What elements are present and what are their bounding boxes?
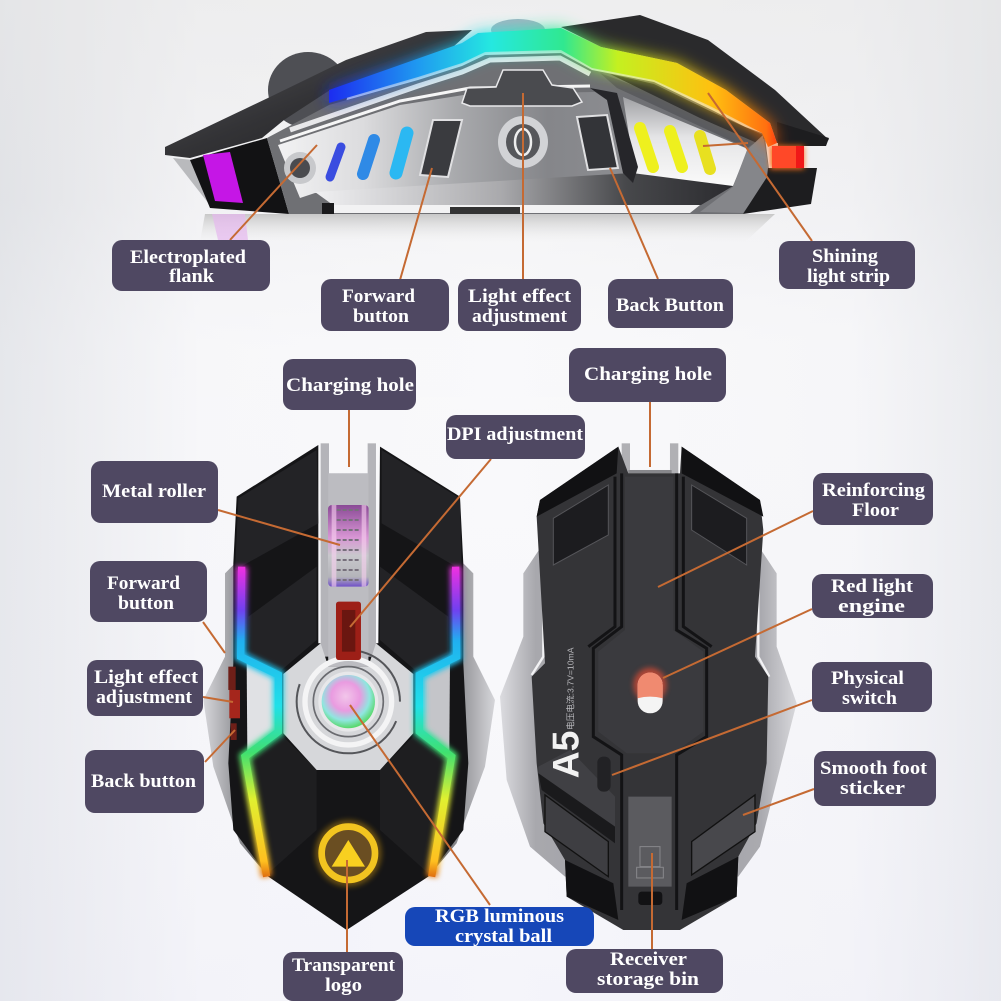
label: Charging hole right <box>569 348 726 402</box>
A5 diagonal band <box>538 750 615 827</box>
label: RGB luminous crystal ball: RGB luminous <box>435 906 564 927</box>
right panel <box>623 97 748 186</box>
central octagon <box>283 643 413 770</box>
label: Reinforcing Floor: Floor <box>852 500 900 521</box>
label: Forward button: Forward <box>342 286 415 307</box>
label: Light effect adjustment: adjustment <box>472 306 568 327</box>
reflection <box>200 214 775 242</box>
forward button <box>420 120 462 177</box>
label: Back button left <box>85 750 204 813</box>
concentric rings <box>297 650 400 753</box>
label: RGB luminous crystal ball: crystal ball <box>455 926 552 947</box>
label: DPI adjustment: DPI adjustment <box>447 424 584 445</box>
flank main panel <box>278 92 632 198</box>
label: Forward button left: button <box>118 593 174 614</box>
right wedge <box>700 135 770 213</box>
right silver wing <box>428 563 495 877</box>
right silver panel <box>420 662 450 752</box>
rating text: 电压电流:3.7V=10mA <box>564 647 575 730</box>
label: Forward button: button <box>353 306 409 327</box>
scroll wheel <box>268 52 348 128</box>
label: Forward button <box>321 279 449 331</box>
yellow light bars <box>640 128 710 169</box>
white edge highlights <box>532 543 769 677</box>
nose <box>190 138 289 214</box>
left top shell <box>165 30 472 158</box>
label: Light effect adjustment <box>458 279 581 331</box>
label: Back button left: Back button <box>91 771 196 792</box>
crystal ball <box>322 675 375 728</box>
label: Electroplated flank: flank <box>169 266 214 287</box>
label: Shining light strip: Shining <box>812 246 879 267</box>
base plate <box>532 447 768 930</box>
foot sticker bottom right <box>692 795 755 875</box>
label: Transparent logo: Transparent <box>292 955 396 976</box>
label: Shining light strip <box>779 241 915 289</box>
label: RGB luminous crystal ball <box>405 906 594 947</box>
central hex panel <box>598 477 703 753</box>
label: Physical switch: switch <box>842 688 897 709</box>
label: Electroplated flank: Electroplated <box>130 247 246 268</box>
physical switch <box>597 757 611 792</box>
label: Metal roller: Metal roller <box>102 481 207 502</box>
label: Light effect adjustment left: Light effect <box>94 667 199 688</box>
receiver bin <box>628 797 672 905</box>
label: Smooth foot sticker: Smooth foot <box>820 758 928 779</box>
leader lines <box>203 93 814 952</box>
label: Forward button left: Forward <box>107 573 180 594</box>
label: Smooth foot sticker <box>814 751 936 806</box>
blue light bars <box>330 133 407 177</box>
label: DPI adjustment <box>446 415 585 459</box>
side buttons <box>228 667 240 740</box>
foot sticker bottom left <box>545 795 608 877</box>
chin silver wedge <box>173 158 209 204</box>
rear curved slot <box>590 88 638 183</box>
crystal ball top <box>491 19 545 41</box>
label: Physical switch <box>812 662 932 712</box>
transparent logo <box>315 820 382 887</box>
label: Charging hole left: Charging hole <box>286 375 414 396</box>
label: Smooth foot sticker: sticker <box>840 778 906 799</box>
charging rails <box>622 443 678 477</box>
light effect dial <box>498 116 548 168</box>
side view mouse <box>165 15 829 242</box>
label: Reinforcing Floor: Reinforcing <box>822 480 926 501</box>
right top shell <box>561 15 829 144</box>
floor grooves <box>588 473 712 910</box>
foot sticker top right <box>692 485 747 565</box>
back button <box>577 115 618 170</box>
label: Light effect adjustment: Light effect <box>468 286 572 307</box>
label: Forward button left <box>90 561 207 622</box>
label: Receiver storage bin: Receiver <box>610 949 688 970</box>
label: Light effect adjustment left: adjustment <box>96 687 193 708</box>
DPI button <box>336 602 361 660</box>
top view mouse <box>203 443 495 930</box>
flank screw <box>284 152 316 184</box>
label: Back Button: Back Button <box>616 295 724 316</box>
foot sticker top left <box>553 485 608 565</box>
flank base <box>267 53 770 214</box>
magenta light <box>203 152 243 203</box>
left LED strip <box>241 567 278 877</box>
top side button <box>462 70 582 106</box>
label: Reinforcing Floor <box>813 473 933 525</box>
label: Red light engine: Red light <box>831 576 914 597</box>
label: Red light engine: engine <box>838 596 905 617</box>
left silver panel <box>247 662 277 752</box>
dark strip above right panel <box>600 73 767 148</box>
label: Charging hole right: Charging hole <box>584 364 712 385</box>
label: Shining light strip: light strip <box>807 266 890 287</box>
silver outer shell <box>500 543 797 877</box>
label: Metal roller <box>91 461 218 523</box>
label: Charging hole left <box>283 359 416 410</box>
label: Transparent logo: logo <box>325 975 362 996</box>
red light engine <box>633 668 667 713</box>
light strip <box>329 28 777 147</box>
black body <box>228 445 468 930</box>
lower band <box>315 173 733 205</box>
silver centre rails <box>321 443 376 667</box>
bottom view mouse <box>500 443 797 930</box>
label: Receiver storage bin: storage bin <box>597 969 699 990</box>
label: Electroplated flank <box>112 240 270 291</box>
label: Red light engine <box>812 574 933 618</box>
right LED strip <box>419 567 457 877</box>
label: Physical switch: Physical <box>831 668 904 689</box>
rear base <box>743 122 829 214</box>
red rear light <box>770 146 804 169</box>
left silver wing <box>203 563 268 877</box>
label: Receiver storage bin <box>566 949 723 993</box>
label: Transparent logo <box>283 952 403 1001</box>
A5 lettering: A5 <box>544 731 586 778</box>
label: Light effect adjustment left <box>87 660 203 716</box>
label: Back Button <box>608 279 733 328</box>
metal roller <box>328 505 369 587</box>
